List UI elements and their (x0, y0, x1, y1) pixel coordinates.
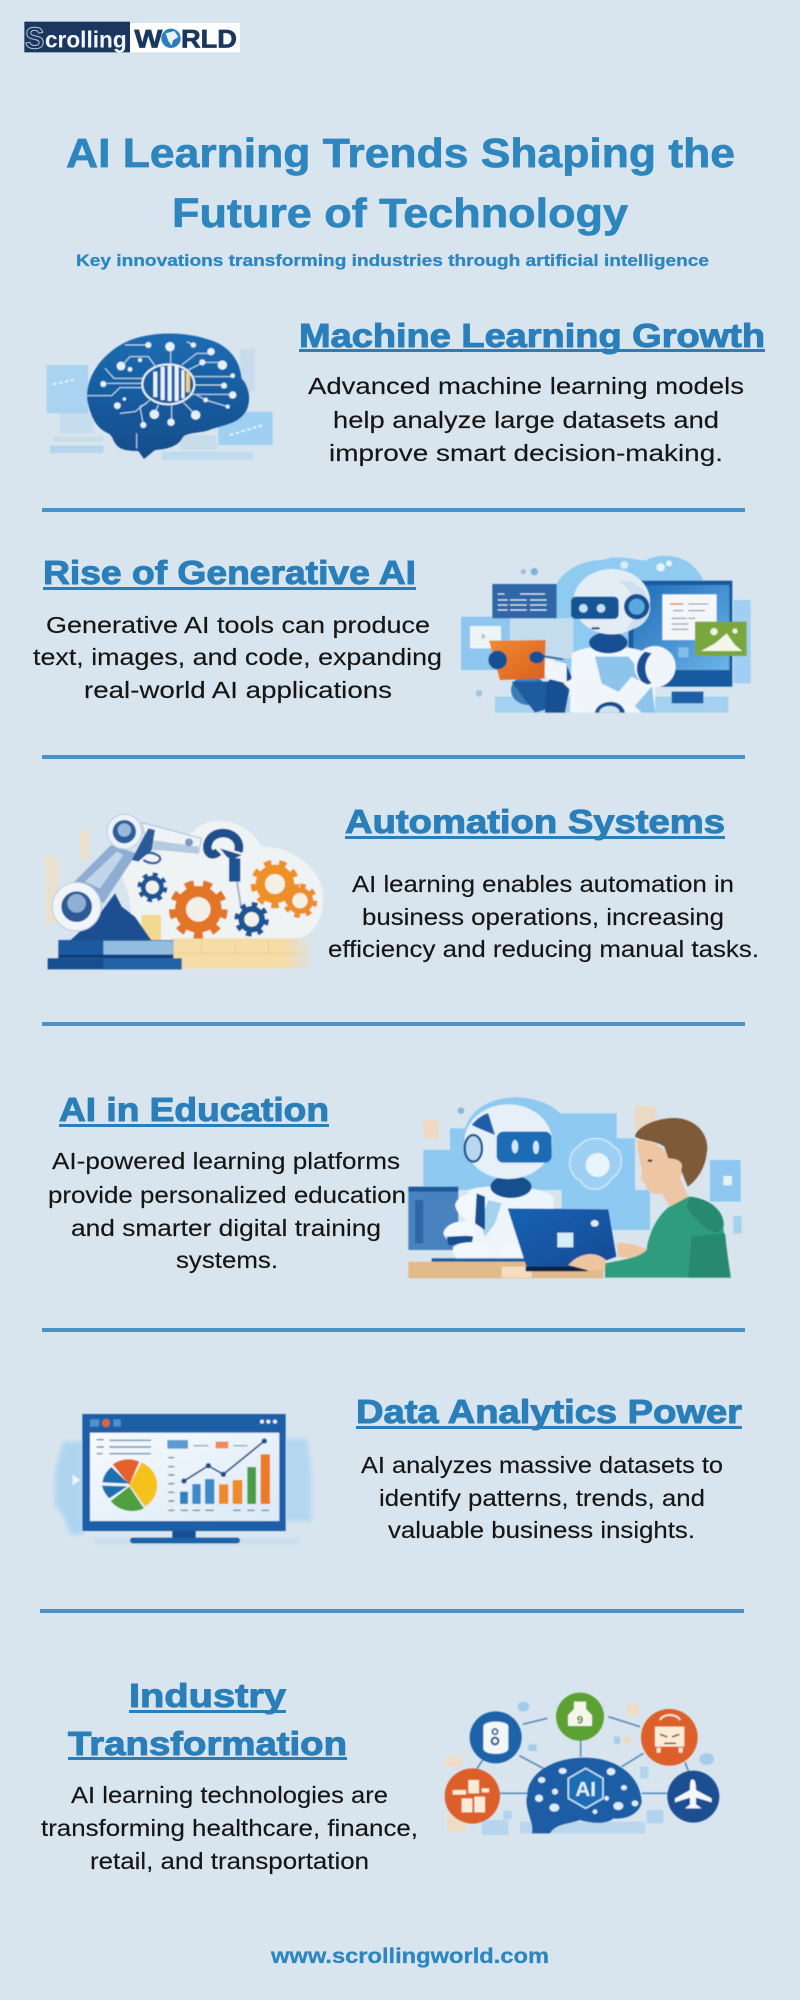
subtitle: Key innovations transforming industries through artificial intelligence (76, 251, 709, 270)
text block: retail, and transportation (90, 1848, 369, 1874)
title: AI Learning Trends Shaping the (66, 130, 735, 176)
text block: and smarter digital training (71, 1215, 381, 1241)
illustration: AI network: AI (575, 1778, 596, 1801)
text block: systems. (176, 1247, 278, 1273)
text block: AI learning enables automation in (352, 871, 734, 897)
panel: machine learning growth (47, 317, 765, 466)
logo: Scrolling World: W (134, 26, 162, 54)
logo: Scrolling World: crolling (45, 26, 127, 52)
gear: medium orange (254, 863, 296, 905)
text block: identify patterns, trends, and (379, 1485, 705, 1511)
text block: AI-powered learning platforms (52, 1148, 400, 1174)
divider 4 (42, 1328, 745, 1332)
panel: rise of generative AI (33, 554, 751, 713)
panel: industry transformation (41, 1677, 719, 1874)
heading: Transformation (68, 1725, 347, 1762)
divider 3 (42, 1022, 745, 1026)
text block: Advanced machine learning models (308, 373, 744, 399)
text block: business operations, increasing (362, 904, 724, 930)
text block: text, images, and code, expanding (33, 644, 442, 670)
text block: Generative AI tools can produce (46, 612, 430, 638)
gear: large orange (173, 884, 224, 935)
text block: help analyze large datasets and (333, 407, 719, 433)
heading (68, 1677, 347, 1762)
heading: Rise of Generative AI (43, 554, 416, 591)
text block: AI learning technologies are (71, 1782, 388, 1808)
text block: efficiency and reducing manual tasks. (328, 936, 759, 962)
text block (361, 1452, 723, 1543)
illustration: robot arm and gears (45, 814, 323, 969)
divider 5 (40, 1609, 744, 1613)
divider 1 (42, 508, 745, 512)
title: Future of Technology (172, 190, 628, 236)
text block: transforming healthcare, finance, (41, 1815, 418, 1841)
text block (328, 871, 759, 962)
gear: small orange (285, 886, 315, 915)
text block: real-world AI applications (84, 677, 392, 703)
illustration: robot with screens (461, 556, 751, 713)
illustration: robot and student (408, 1097, 742, 1278)
illustration: AI network: 9 (577, 1715, 583, 1727)
illustration: analytics dashboard (55, 1414, 312, 1544)
text block (33, 612, 442, 703)
text block (48, 1148, 406, 1273)
text block: valuable business insights. (388, 1517, 695, 1543)
heading: Industry (129, 1677, 287, 1714)
heading: Automation Systems (345, 803, 725, 840)
footer: website: www.scrollingworld.com (270, 1945, 549, 1968)
heading: AI in Education (59, 1091, 329, 1128)
text block (308, 373, 744, 466)
gear: lower blue (237, 905, 266, 934)
divider 2 (42, 755, 745, 759)
illustration: AI network (445, 1693, 719, 1835)
panel: AI in education (48, 1091, 742, 1278)
text block: provide personalized education (48, 1182, 406, 1208)
panel: automation systems (45, 803, 759, 969)
logo: Scrolling World: S (25, 21, 44, 55)
heading: Machine Learning Growth (299, 317, 765, 354)
icon: circuit brain (47, 334, 273, 460)
text block (41, 1782, 418, 1874)
heading: Data Analytics Power (356, 1393, 742, 1430)
logo: Scrolling World (24, 21, 240, 55)
title (66, 130, 735, 236)
panel: data analytics power (55, 1393, 742, 1544)
text block: improve smart decision-making. (329, 440, 723, 466)
logo: Scrolling World: RLD (181, 26, 237, 54)
text block: AI analyzes massive datasets to (361, 1452, 723, 1478)
gear: small blue (140, 875, 165, 900)
